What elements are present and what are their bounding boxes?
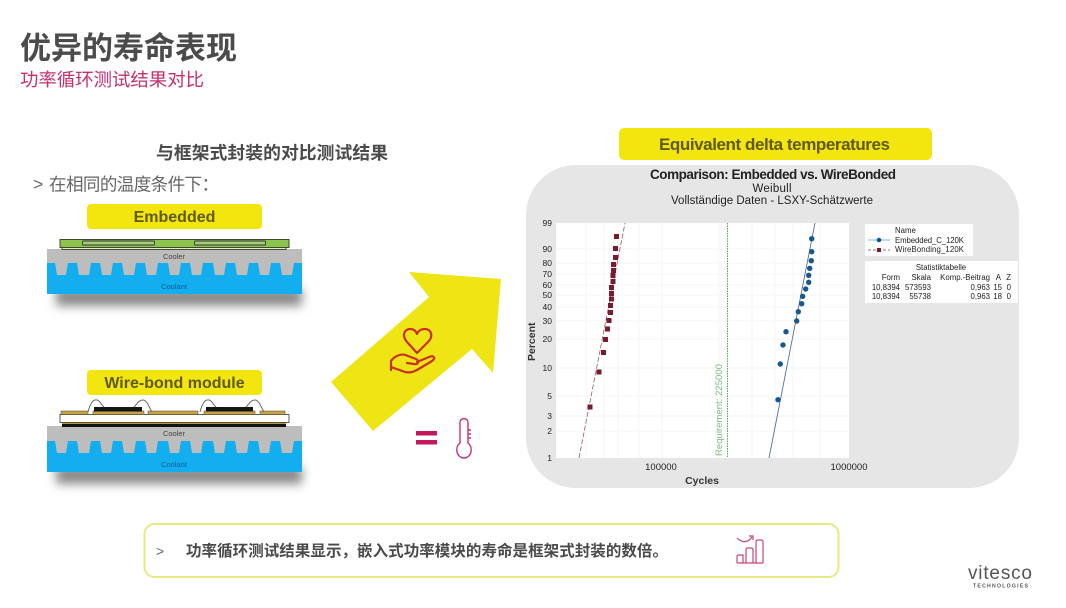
statistics table: 18 [993, 292, 1002, 301]
y axis labels: 50 [543, 290, 552, 300]
coolant [47, 441, 302, 472]
y axis labels: 90 [543, 244, 552, 254]
statistics table: 573593 [905, 283, 931, 292]
logo: vitesco technologies: TECHNOLOGIES [973, 584, 1029, 590]
statistics table: Skala [911, 273, 932, 282]
title: 优异的寿命表现 [20, 31, 237, 66]
y axis labels: 99 [543, 218, 552, 228]
legend: Name [895, 226, 916, 235]
chart title: Comparison: Embedded vs. WireBonded [650, 167, 896, 182]
label: Embedded [87, 204, 262, 229]
data: embedded markers [775, 236, 814, 402]
y axis labels [543, 218, 552, 463]
icon: hand holding heart [391, 329, 434, 372]
y axis labels: 70 [543, 269, 552, 279]
statistics table: Komp.-Beitrag [940, 273, 990, 282]
legend: WireBonding_120K [895, 245, 965, 254]
statistics table: A [996, 273, 1002, 282]
legend: Embedded_C_120K [895, 236, 965, 245]
data: wire-bonding markers [588, 234, 619, 410]
y axis labels: 80 [543, 258, 552, 268]
callout: conclusion: > [156, 543, 164, 559]
text: same temperature condition: 在相同的温度条件下： [49, 174, 219, 194]
x axis title: Cycles [685, 475, 719, 487]
cooler [47, 249, 302, 289]
x axis labels [645, 462, 867, 473]
y axis title: Percent [526, 322, 538, 361]
statistics table [865, 261, 1018, 303]
statistics table: 0,963 [970, 292, 990, 301]
callout: conclusion: 功率循环测试结果显示，嵌入式功率模块的寿命是框架式封装的数倍。 [186, 541, 668, 560]
panel: weibull chart [526, 165, 1019, 488]
coolant [47, 263, 302, 294]
chart title: Weibull [752, 183, 792, 195]
icon: rising bar chart [737, 536, 763, 563]
label: Wire-bond module: Wire-bond module [104, 375, 245, 392]
y axis labels: 10 [543, 363, 552, 373]
logo: vitesco technologies: vitesco [968, 563, 1032, 584]
statistics table: 10,8394 [872, 292, 901, 301]
fit line: wire-bonding [579, 223, 625, 458]
y axis labels: 20 [543, 334, 552, 344]
label: equivalent delta temperatures [619, 128, 932, 160]
icon: thermometer [457, 418, 471, 458]
panel: wire-bond module diagram [47, 370, 302, 484]
y axis labels: 30 [543, 316, 552, 326]
y axis labels: 5 [547, 391, 552, 401]
chart title: Vollständige Daten - LSXY-Schätzwerte [671, 195, 873, 207]
statistics table: Z [1006, 273, 1011, 282]
arrow: big yellow arrow [331, 272, 501, 431]
panel: embedded module diagram: Coolant [161, 282, 188, 291]
cooler [47, 426, 302, 466]
panel: wire-bond module diagram: Coolant [161, 460, 188, 469]
text: same temperature condition: > [33, 174, 43, 194]
statistics table: 0 [1007, 292, 1012, 301]
panel: embedded module diagram [47, 204, 302, 306]
y axis labels: 1 [547, 453, 552, 463]
requirement line: Requirement: 225000 [714, 364, 725, 456]
statistics table: 0,963 [970, 283, 990, 292]
x axis labels: 100000 [645, 462, 677, 473]
statistics table: 15 [993, 283, 1003, 292]
plot area [556, 223, 849, 458]
callout: conclusion [144, 524, 838, 577]
label: Wire-bond module [87, 370, 262, 395]
x axis labels: 1000000 [831, 462, 867, 473]
label: equivalent delta temperatures: Equivalent delta temperatures [659, 135, 890, 154]
statistics table: Statistiktabelle [916, 263, 966, 272]
legend [865, 224, 973, 256]
module: wire-bond package [60, 400, 289, 427]
subtitle: 功率循环测试结果对比 [20, 69, 204, 90]
statistics table: 55738 [909, 292, 931, 301]
y axis labels: 3 [547, 411, 552, 421]
chart title [650, 167, 896, 207]
label: Embedded: Embedded [134, 209, 215, 226]
y axis labels: 60 [543, 280, 552, 290]
icon: equals sign [416, 431, 437, 444]
panel: wire-bond module diagram: Cooler [163, 429, 186, 438]
statistics table: Form [882, 273, 900, 282]
fit line: embedded [769, 223, 815, 458]
y axis labels: 2 [547, 426, 552, 436]
statistics table: 0 [1007, 283, 1012, 292]
module: green embedded package [60, 240, 289, 250]
statistics table: 10,8394 [872, 283, 901, 292]
y axis labels: 40 [543, 302, 552, 312]
panel: embedded module diagram: Cooler [163, 252, 186, 261]
heading: comparison test results: 与框架式封装的对比测试结果 [156, 143, 388, 163]
